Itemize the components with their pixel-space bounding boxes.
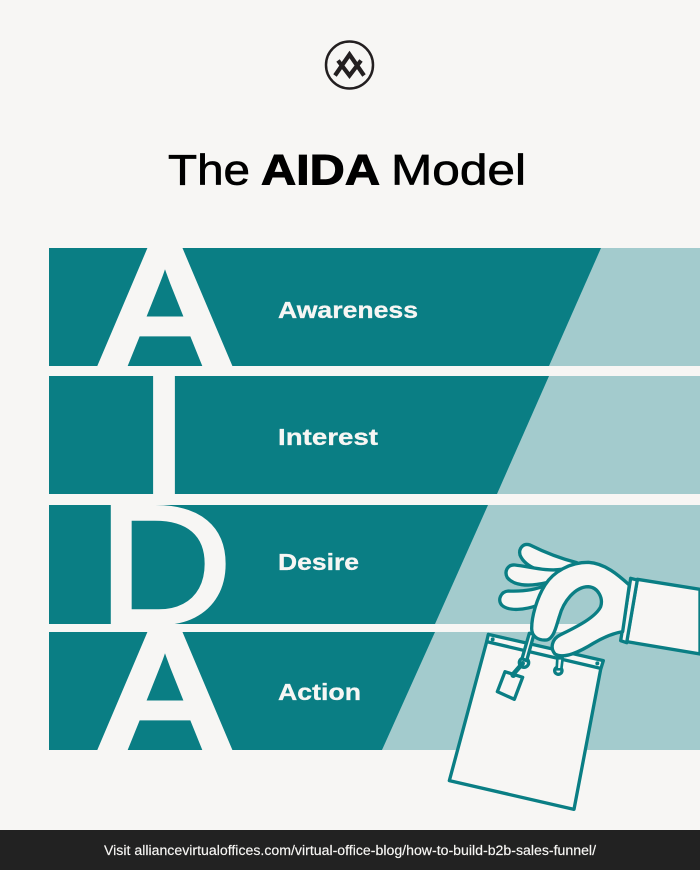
panel: interest band [49, 376, 549, 494]
label: Awareness: Awareness [278, 297, 418, 323]
title [168, 146, 526, 194]
logo [326, 42, 373, 88]
title word: AIDA: AIDA [261, 146, 380, 194]
panel: desire band [49, 505, 488, 624]
panel: light background bands [382, 248, 700, 750]
title word: The: The [168, 146, 250, 194]
cuff [621, 578, 637, 643]
sleeve [627, 579, 700, 654]
fingers [500, 544, 577, 609]
label: Action: Action [278, 679, 361, 705]
panel: awareness band [49, 248, 601, 366]
label: Interest: Interest [278, 424, 378, 450]
big letter D: D [97, 470, 233, 660]
palm and thumb [532, 562, 629, 656]
big letter A: A [94, 212, 236, 402]
footer link text: Visit alliancevirtualoffices.com/virtual-office-blog/how-to-build-b2b-sales-funnel/ [104, 843, 596, 858]
footer bar [0, 830, 700, 870]
panel: action band [49, 632, 435, 750]
big letter I: I [143, 339, 185, 531]
price tag [497, 633, 534, 699]
label: Desire: Desire [278, 549, 359, 575]
big letter A: A [94, 596, 236, 786]
title word: Model: Model [391, 146, 526, 194]
divider strip [380, 624, 582, 632]
illustration: hand holding shopping bag [449, 544, 700, 809]
shopping bag [449, 634, 603, 809]
